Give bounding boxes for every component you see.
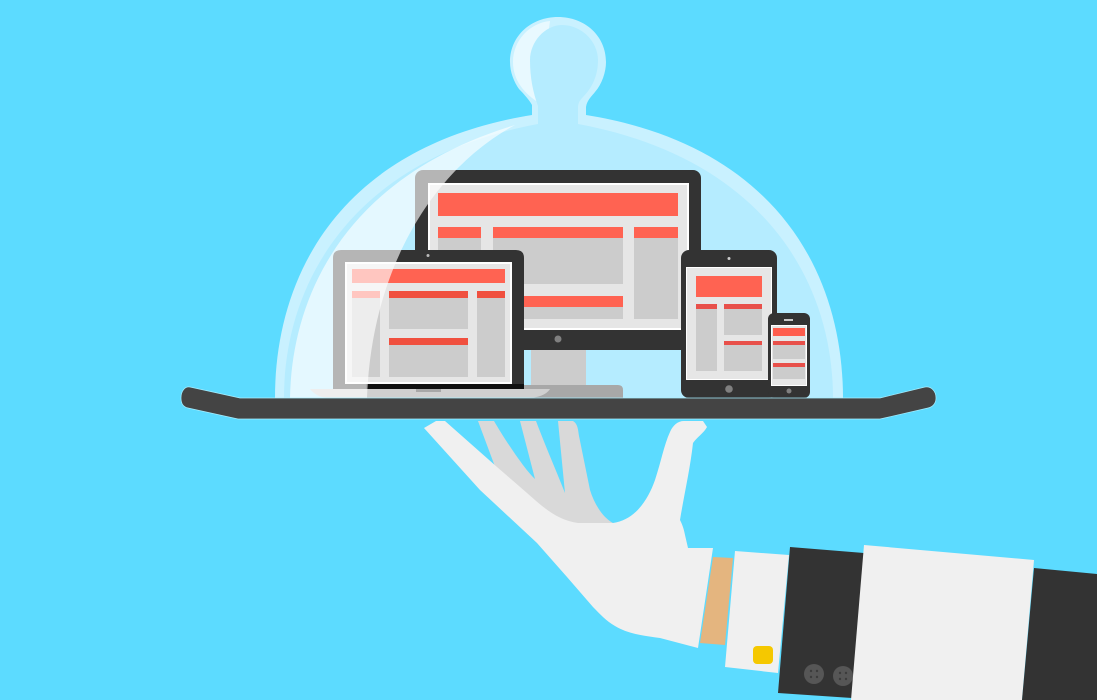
smartphone xyxy=(768,313,810,398)
laptop screen xyxy=(345,262,512,384)
phone screen xyxy=(771,325,807,386)
cufflink xyxy=(753,646,773,664)
tablet header bar xyxy=(696,276,762,297)
desktop monitor xyxy=(415,170,701,398)
serving tray xyxy=(181,387,936,419)
phone content blocks xyxy=(773,328,805,379)
laptop xyxy=(310,250,550,398)
jacket cuff xyxy=(778,547,864,698)
laptop camera xyxy=(426,254,430,257)
tablet content columns xyxy=(696,304,762,371)
tablet body xyxy=(681,250,777,398)
jacket buttons xyxy=(804,664,853,686)
laptop base xyxy=(310,389,550,398)
laptop lid xyxy=(333,250,524,389)
glove xyxy=(424,421,713,648)
monitor body xyxy=(415,170,701,350)
wrist xyxy=(700,557,733,645)
tablet xyxy=(681,250,777,398)
shirt cuff xyxy=(725,551,789,673)
glass dome xyxy=(275,17,843,398)
laptop content columns xyxy=(352,291,505,377)
dome rim xyxy=(275,17,843,398)
jacket sleeve xyxy=(1022,568,1097,700)
tablet camera xyxy=(728,257,730,260)
monitor screen xyxy=(428,183,689,330)
dome inner glass xyxy=(284,25,833,398)
monitor stand base xyxy=(480,385,623,398)
phone speaker xyxy=(784,319,793,321)
glass reflection xyxy=(290,125,515,398)
tablet screen xyxy=(686,267,772,380)
monitor content columns xyxy=(438,227,678,319)
monitor button xyxy=(554,336,562,342)
tablet home button xyxy=(725,385,733,393)
monitor stand xyxy=(531,350,586,385)
palm and front fingers xyxy=(424,421,713,648)
laptop header bar xyxy=(352,269,505,283)
back fingers xyxy=(478,421,613,523)
phone body xyxy=(768,313,810,398)
phone home button xyxy=(786,388,792,394)
knob highlight xyxy=(513,21,550,104)
white sleeve band xyxy=(851,545,1034,700)
monitor header bar xyxy=(438,193,678,216)
sleeve xyxy=(725,545,1097,700)
